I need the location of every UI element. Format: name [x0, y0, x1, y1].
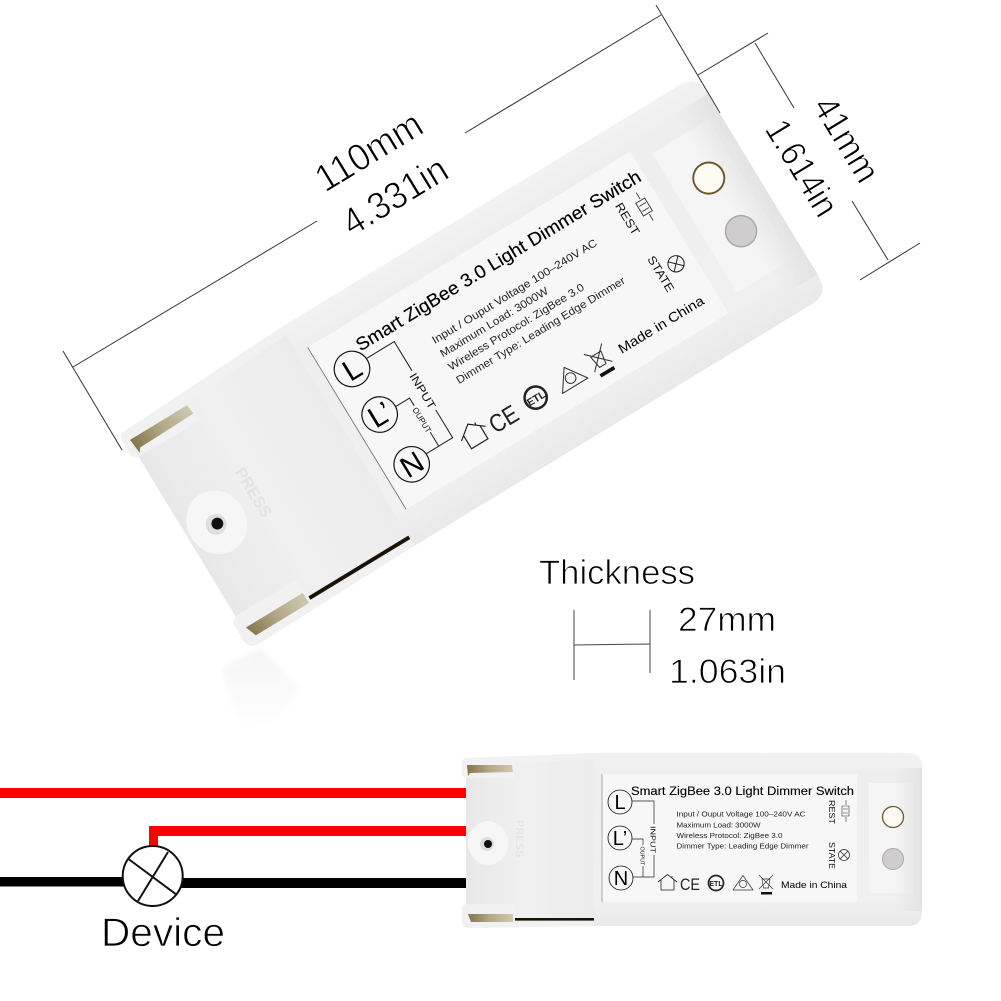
embossed press text: PRESS [231, 464, 275, 521]
specifications: Maximum Load: 3000W [676, 820, 761, 829]
terminal L prime: L’ [613, 828, 627, 850]
top clip slot [130, 404, 197, 454]
rest label: REST [827, 800, 836, 824]
wiring lines [366, 342, 453, 455]
icon: ETL mark [520, 382, 551, 413]
terminal N: N [394, 445, 430, 485]
rest switch icon [842, 800, 849, 822]
red switched wire [149, 826, 466, 850]
terminal L prime [608, 826, 632, 850]
icon: CE mark: CE [680, 875, 700, 894]
made in china: Made in China [781, 880, 848, 890]
dimension: length 110mm [63, 5, 720, 450]
state lamp icon [838, 850, 850, 860]
specifications: Wireless Protocol: ZigBee 3.0 [446, 282, 587, 373]
screw hole [202, 510, 230, 539]
screw hole [480, 837, 494, 851]
terminal L prime: L’ [362, 396, 398, 435]
case right shading [674, 94, 818, 295]
case right shading [895, 768, 922, 911]
rotated device photo [115, 75, 831, 650]
label [308, 151, 729, 509]
lid slit [515, 918, 594, 921]
lid slit [308, 536, 410, 600]
reset button [687, 157, 730, 199]
icon: WEEE bin [584, 344, 617, 379]
LED panel [869, 783, 913, 893]
horizontal device photo [462, 753, 922, 928]
terminal L [608, 790, 632, 814]
specifications: Input / Ouput Voltage 100–240V AC [676, 810, 806, 819]
bottom clip slot [246, 593, 309, 638]
label left edge [601, 774, 603, 902]
thickness heading: Thickness [539, 554, 695, 592]
reset button [882, 806, 904, 828]
reflection under device [222, 648, 300, 730]
thickness values [669, 601, 786, 691]
screw boss [468, 821, 508, 865]
top clip slot [467, 765, 513, 776]
specifications [676, 810, 809, 850]
state LED [882, 848, 904, 870]
state label: STATE [644, 253, 677, 295]
bottom clip slot [468, 914, 513, 922]
wiring diagram [0, 788, 466, 906]
icon: ETL mark [708, 876, 724, 890]
thickness dimension marker [574, 610, 650, 680]
device label: Device [101, 911, 225, 955]
icon: RCM triangle [551, 360, 588, 393]
label title: Smart ZigBee 3.0 Light Dimmer Switch [631, 784, 854, 798]
output label: OUPUT [638, 846, 644, 866]
dimension: width 41mm: 1.614in [757, 112, 847, 224]
terminal L [328, 345, 376, 393]
label [602, 774, 857, 902]
specifications: Wireless Protocol: ZigBee 3.0 [676, 831, 782, 840]
rest label: REST [612, 200, 643, 238]
wiring lines [632, 801, 654, 877]
main case [281, 75, 829, 546]
dimension: width 41mm [698, 33, 920, 280]
label title: Smart ZigBee 3.0 Light Dimmer Switch [352, 166, 645, 355]
icon: CE mark: CE [484, 400, 524, 439]
thickness values: 27mm [678, 601, 776, 639]
black neutral wire [0, 877, 466, 888]
icon: RCM triangle [733, 876, 753, 890]
terminal N [387, 440, 436, 489]
state lamp icon [665, 253, 687, 275]
icon: house [456, 417, 492, 451]
icon: device lamp [123, 846, 183, 906]
label left edge [308, 347, 406, 509]
specifications: Input / Ouput Voltage 100–240V AC [430, 237, 600, 347]
icon: WEEE bin [759, 875, 773, 894]
dimension: length 110mm: 110mm [308, 103, 431, 201]
LED panel [652, 120, 792, 293]
terminal N: N [614, 868, 628, 890]
icon: ETL mark: ETL [525, 389, 548, 409]
state LED [720, 210, 762, 253]
dimension: length 110mm: 4.331in [335, 149, 456, 245]
main case [594, 753, 922, 926]
terminal L: L [614, 792, 626, 814]
made in china: Made in China [615, 293, 707, 357]
input label: INPUT [648, 826, 658, 854]
terminal L prime [355, 390, 404, 439]
icon: ETL mark: ETL [709, 881, 723, 888]
thickness values: 1.063in [669, 653, 786, 691]
specifications: Dimmer Type: Leading Edge Dimmer [676, 841, 809, 850]
terminal N [609, 866, 633, 890]
terminal L: L [337, 351, 368, 388]
icon: house [658, 874, 677, 890]
device rear housing [462, 753, 594, 928]
rest switch icon [631, 190, 657, 224]
specifications: Maximum Load: 3000W [438, 285, 551, 360]
specifications [430, 235, 628, 387]
specifications: Dimmer Type: Leading Edge Dimmer [454, 275, 628, 387]
lid [124, 335, 408, 634]
device rear housing [115, 327, 416, 650]
state label: STATE [827, 842, 836, 869]
dimension: width 41mm: 41mm [805, 89, 889, 190]
lid [466, 759, 594, 918]
input label: INPUT [406, 371, 438, 412]
output label: OUPUT [410, 406, 433, 435]
screw boss [174, 479, 259, 566]
embossed press text: PRESS [513, 820, 525, 857]
red live wire [0, 788, 466, 798]
